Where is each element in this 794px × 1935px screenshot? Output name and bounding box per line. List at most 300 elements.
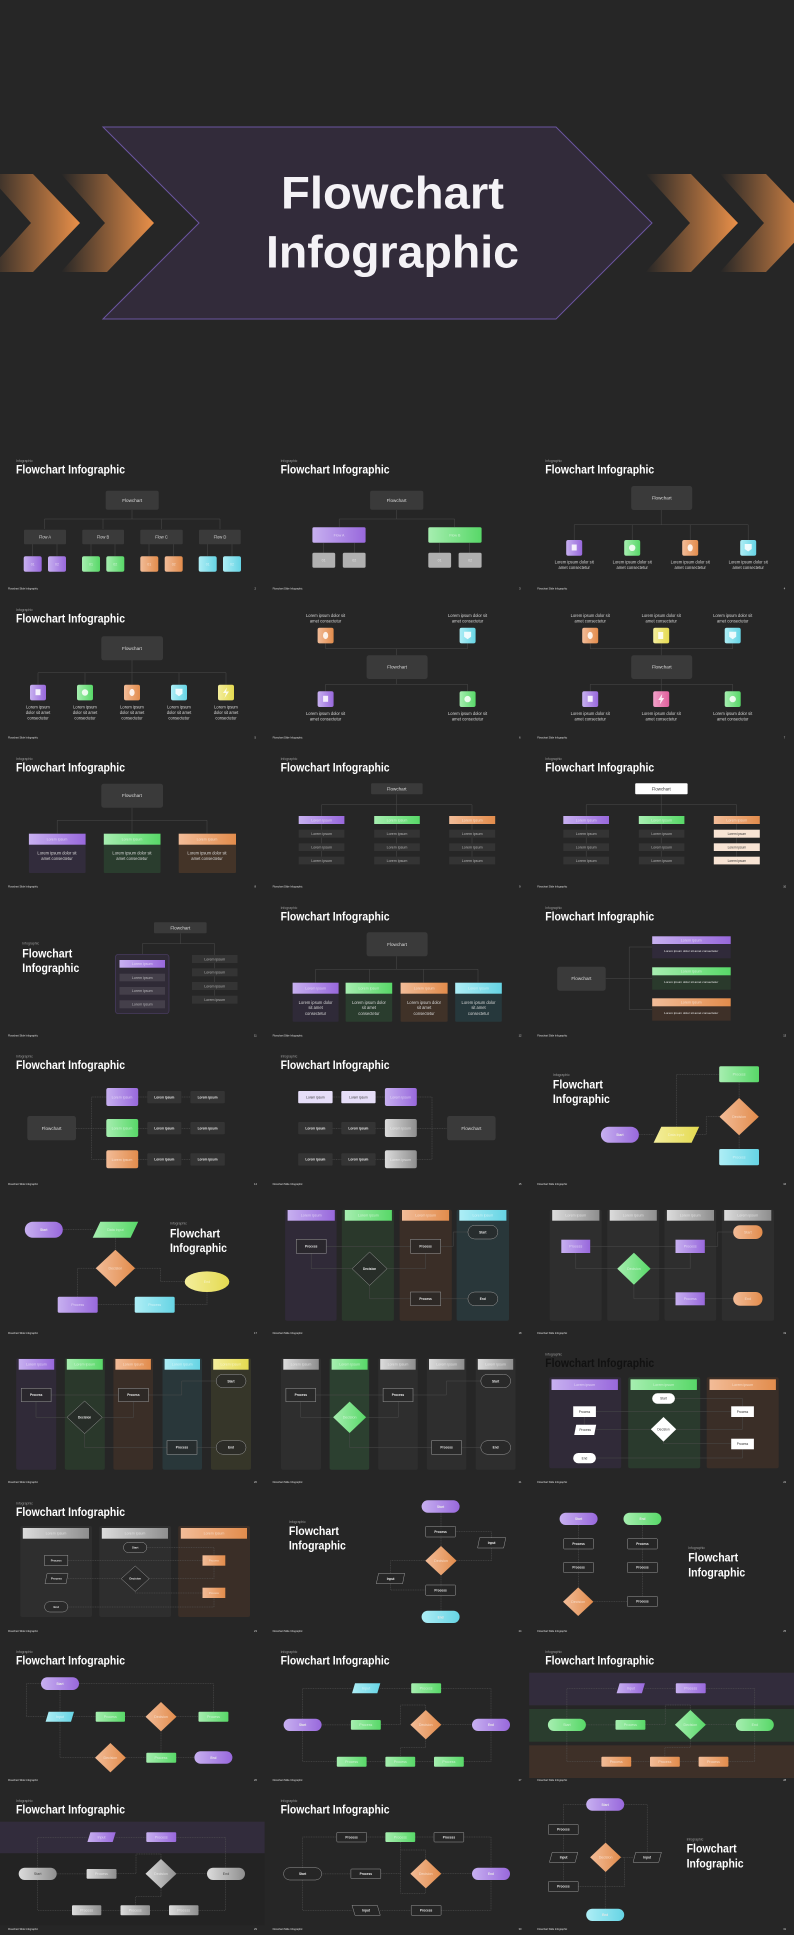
heading: Flowchart Infographic xyxy=(281,762,390,774)
swimlane headers: Lorem ipsum xyxy=(473,1214,493,1218)
input parallelogram xyxy=(93,1222,138,1238)
left nodes: Process xyxy=(557,1885,570,1889)
start terminator xyxy=(124,1542,147,1553)
connectors xyxy=(76,1097,190,1159)
end pill: End xyxy=(488,1872,494,1876)
process: cyan: Process xyxy=(733,1156,746,1160)
root box: Flowchart xyxy=(387,498,407,503)
root box xyxy=(27,1116,76,1140)
item grid: Lorem ipsum xyxy=(305,1158,326,1162)
swimlane headers: Lorem ipsum xyxy=(26,1362,47,1366)
heading: Flowchart Infographic xyxy=(545,1656,655,1668)
icon: purple flag xyxy=(30,685,46,700)
captions: Lorem ipsum dolor sit xyxy=(671,560,711,565)
decision: Decision xyxy=(419,1872,433,1876)
slide 4: four icons xyxy=(537,459,786,590)
icon: pink runner xyxy=(653,691,669,707)
column: purple: Lorem ipsum xyxy=(576,832,597,836)
decision bottom: Decision xyxy=(104,1756,117,1760)
process nodes: Process xyxy=(177,1909,190,1913)
root box xyxy=(557,967,606,991)
slide 20: five swimlanes colored xyxy=(8,1358,257,1484)
heading: Flowchart Infographic xyxy=(16,1656,126,1668)
process nodes: Process xyxy=(345,1760,358,1764)
left nodes: Input xyxy=(560,1856,568,1860)
heading: Flowchart Infographic xyxy=(281,1060,390,1072)
arrow: right chevrons xyxy=(646,174,794,272)
decision diamond xyxy=(425,1546,457,1575)
root box xyxy=(447,1116,496,1140)
footer: 13 xyxy=(783,1033,787,1037)
column: purple xyxy=(299,816,344,864)
column: purple: Lorem ipsum xyxy=(576,846,597,850)
input parallelogram: Data input xyxy=(107,1228,124,1232)
card: purple: Lorem ipsum dolor sit amet consectetur xyxy=(664,949,718,953)
flow B: Flow B xyxy=(449,533,461,537)
footer: 31 xyxy=(783,1927,787,1931)
heading: Infographic xyxy=(545,1650,562,1654)
swimlane headers: Lorem ipsum xyxy=(737,1214,758,1218)
captions: amet consectetur xyxy=(674,565,707,570)
gray pills xyxy=(19,1868,245,1880)
slide 25: two vertical flows xyxy=(537,1513,787,1633)
process nodes xyxy=(337,1683,464,1767)
card: cyan xyxy=(455,983,502,1022)
footer xyxy=(537,1331,787,1335)
icon: yellow bolt xyxy=(218,685,234,700)
numbered squares: 02 xyxy=(172,562,176,566)
input right xyxy=(478,1538,506,1548)
left nodes: Process xyxy=(51,1577,62,1581)
swimlane bodies xyxy=(549,1377,779,1468)
card: purple: sit amet xyxy=(308,1005,324,1010)
numbered squares: 01 xyxy=(147,562,151,566)
end terminator: End xyxy=(54,1605,59,1609)
heading: Infographic xyxy=(289,1541,346,1553)
connectors xyxy=(38,1837,226,1910)
connectors xyxy=(574,510,748,540)
footer: 26 xyxy=(254,1778,257,1782)
captions xyxy=(555,560,769,570)
heading xyxy=(16,1054,126,1072)
card: purple xyxy=(652,936,731,958)
footer: Flowchart Slide Infographic xyxy=(537,1629,568,1633)
footer xyxy=(8,1778,257,1782)
swimlane bodies xyxy=(16,1358,251,1470)
decision diamond: Decision xyxy=(571,1600,585,1604)
captions xyxy=(306,613,488,722)
process nodes: Process xyxy=(30,1393,43,1397)
footer xyxy=(8,736,256,740)
footer: Flowchart Slide Infographic xyxy=(8,1182,39,1186)
start and end pills: Start xyxy=(299,1723,307,1727)
captions: amet consectetur xyxy=(452,618,484,623)
captions: amet consectetur xyxy=(310,717,342,722)
item grid: Lorem ipsum xyxy=(154,1095,174,1099)
process row: Process xyxy=(207,1715,220,1719)
heading xyxy=(16,608,126,626)
process nodes: Process xyxy=(707,1760,720,1764)
process nodes: Process xyxy=(442,1760,456,1764)
connectors xyxy=(63,1230,207,1305)
process nodes: Process xyxy=(624,1723,637,1727)
process nodes: Process xyxy=(305,1244,318,1248)
heading: Infographic xyxy=(170,1222,187,1226)
item grid: Lorem ipsum xyxy=(306,1095,325,1099)
root box xyxy=(631,655,692,679)
decision top: Decision xyxy=(154,1715,168,1719)
heading: Infographic xyxy=(16,1054,33,1058)
white left nodes: Process xyxy=(579,1428,591,1432)
hero banner xyxy=(0,127,794,319)
heading xyxy=(545,906,655,924)
heading: Infographic xyxy=(22,963,80,975)
process nodes xyxy=(72,1832,198,1915)
start pill: Start xyxy=(40,1228,48,1232)
captions: consectetur xyxy=(168,715,190,720)
slide 10: highlighted column xyxy=(537,757,787,888)
heading: Infographic xyxy=(281,459,298,463)
heading: Flowchart xyxy=(289,1526,339,1538)
footer xyxy=(273,586,521,590)
captions: amet consectetur xyxy=(558,565,591,570)
terminators xyxy=(216,1374,246,1454)
connectors xyxy=(57,808,207,834)
footer xyxy=(537,586,786,590)
heading: Infographic xyxy=(16,608,33,612)
footer: 7 xyxy=(784,736,786,740)
heading xyxy=(687,1838,744,1870)
heading xyxy=(16,757,126,774)
icon: cyan board xyxy=(460,628,476,643)
start pill xyxy=(422,1500,460,1513)
end pill xyxy=(573,1453,596,1463)
arrow: left chevrons xyxy=(0,174,154,272)
card: orange xyxy=(652,998,731,1021)
numbered squares: 01 xyxy=(31,562,35,566)
card: green: Lorem ipsum xyxy=(359,986,379,990)
root box xyxy=(154,922,207,933)
flow boxes: Flow A xyxy=(39,534,51,540)
start and end pills: End xyxy=(488,1723,494,1727)
captions: dolor sit amet xyxy=(167,710,192,715)
numbered squares: 01 xyxy=(206,562,210,566)
footer: 16 xyxy=(783,1182,787,1186)
card: green: Lorem ipsum xyxy=(681,970,702,974)
swimlane headers: Lorem ipsum xyxy=(680,1214,701,1218)
footer xyxy=(537,1182,787,1186)
root box: Flowchart xyxy=(652,665,672,670)
footer: Flowchart Slide Infographic xyxy=(537,1033,568,1037)
card: cyan: Lorem ipsum dolor xyxy=(462,1000,496,1005)
card: green: Lorem ipsum dolor xyxy=(352,1000,386,1005)
heading xyxy=(16,1799,126,1816)
captions: dolor sit amet xyxy=(214,710,239,715)
card: green: Lorem ipsum xyxy=(122,838,142,842)
card: purple: consectetur xyxy=(305,1011,327,1016)
footer: Flowchart Slide Infographic xyxy=(537,1182,568,1186)
decision diamond xyxy=(563,1587,593,1616)
card: green: amet consectetur xyxy=(116,856,148,861)
start outlined xyxy=(284,1868,322,1880)
white right nodes: Process xyxy=(737,1410,749,1414)
heading: Flowchart xyxy=(687,1844,737,1856)
footer: Flowchart Slide Infographic xyxy=(273,586,303,590)
process lower xyxy=(146,1753,176,1763)
root box: Flowchart xyxy=(652,496,672,500)
footer: 17 xyxy=(254,1331,257,1335)
swimlane headers: Lorem ipsum xyxy=(388,1362,408,1366)
left nodes xyxy=(548,1824,578,1892)
decision green xyxy=(617,1253,651,1285)
footer xyxy=(273,1927,522,1931)
input right xyxy=(633,1852,661,1862)
heading: Flowchart Infographic xyxy=(545,762,655,774)
top row xyxy=(337,1832,464,1842)
footer: Flowchart Slide Infographic xyxy=(273,1629,303,1633)
panel: central arrow xyxy=(103,127,652,319)
footer: 22 xyxy=(783,1480,787,1484)
heading xyxy=(289,1520,346,1553)
heading: Flowchart xyxy=(170,1228,220,1240)
column: green: Lorem ipsum xyxy=(387,846,407,850)
footer xyxy=(273,736,521,740)
captions: amet consectetur xyxy=(310,618,342,623)
root box xyxy=(631,486,692,510)
colored nodes: Lorem ipsum xyxy=(390,1096,411,1100)
process nodes: Process xyxy=(658,1760,672,1764)
connectors xyxy=(303,1688,491,1762)
card: orange: Lorem ipsum xyxy=(681,1001,702,1005)
icon: green gear xyxy=(725,691,741,707)
card: green xyxy=(104,834,160,873)
gray pills: End xyxy=(223,1872,229,1876)
top row: Process xyxy=(394,1836,407,1840)
process bottom: Process xyxy=(434,1588,447,1592)
right processes xyxy=(628,1539,657,1607)
footer: Flowchart Slide Infographic xyxy=(273,1033,303,1037)
icon: purple flag xyxy=(582,691,598,707)
captions: consectetur xyxy=(27,715,49,720)
root box: Flowchart xyxy=(387,786,407,792)
column: green xyxy=(639,816,684,864)
terminators: End xyxy=(493,1446,499,1450)
heading: Infographic xyxy=(688,1567,746,1579)
heading xyxy=(281,1650,390,1668)
root box: Flowchart xyxy=(170,926,191,930)
footer: 15 xyxy=(519,1182,522,1186)
input xyxy=(352,1683,380,1693)
captions xyxy=(26,705,239,720)
footer xyxy=(8,1331,257,1335)
bottom row: Process xyxy=(420,1908,433,1912)
root box: Flowchart xyxy=(387,665,408,670)
icon: purple flag xyxy=(566,540,582,556)
card: cyan: Lorem ipsum xyxy=(468,986,489,990)
connectors xyxy=(606,947,652,1010)
swimlane headers: Lorem ipsum xyxy=(339,1362,360,1366)
process top xyxy=(426,1526,456,1537)
footer: 18 xyxy=(519,1331,522,1335)
start pill xyxy=(41,1677,79,1690)
heading dark: Flowchart Infographic xyxy=(545,1358,655,1370)
footer xyxy=(8,1033,257,1037)
input parallelogram xyxy=(654,1127,699,1143)
colored nodes: Lorem ipsum xyxy=(112,1158,132,1162)
heading: Infographic xyxy=(16,757,33,761)
footer: 3 xyxy=(519,586,521,590)
heading: Flowchart xyxy=(688,1553,738,1565)
footer: 24 xyxy=(519,1629,522,1633)
decision outline: Decision xyxy=(129,1577,141,1581)
card: purple: Lorem ipsum xyxy=(305,986,326,990)
end pill xyxy=(472,1868,510,1880)
numbered squares: 02 xyxy=(468,558,472,562)
heading xyxy=(22,942,80,975)
item grid: Lorem ipsum xyxy=(154,1158,174,1162)
start pill: Start xyxy=(56,1682,65,1686)
captions: amet consectetur xyxy=(574,618,607,623)
root box xyxy=(370,491,423,510)
flow boxes: Flow B xyxy=(97,534,110,540)
connectors xyxy=(586,794,737,857)
footer: 20 xyxy=(254,1480,257,1484)
start pill xyxy=(586,1798,624,1811)
heading: Infographic xyxy=(688,1546,705,1550)
footer xyxy=(8,1629,257,1633)
swimlane headers xyxy=(552,1379,776,1390)
end terminator xyxy=(45,1602,68,1612)
item grid xyxy=(298,1091,376,1166)
icon: orange hand xyxy=(318,628,334,643)
process nodes: Process xyxy=(394,1760,407,1764)
swimlane headers xyxy=(288,1210,506,1221)
column: orange: Lorem ipsum xyxy=(462,832,483,836)
green pills: End xyxy=(752,1723,758,1727)
footer: Flowchart Slide Infographic xyxy=(537,586,568,590)
footer: Flowchart Slide Infographic xyxy=(273,736,303,740)
footer: Flowchart Slide Infographic xyxy=(8,736,39,740)
footer: 9 xyxy=(519,884,521,888)
decision outline xyxy=(352,1252,387,1285)
connectors xyxy=(567,1688,755,1762)
footer: Flowchart Slide Infographic xyxy=(273,1778,303,1782)
decision: Decision xyxy=(154,1872,168,1876)
item grid: Lorem ipsum xyxy=(154,1126,174,1130)
slide 17: flow with ellipse xyxy=(8,1222,257,1335)
terminators: Start xyxy=(227,1379,236,1383)
heading: Infographic xyxy=(281,1054,298,1058)
item grid: Lorem ipsum xyxy=(198,1126,218,1130)
item grid: Lorem ipsum xyxy=(348,1126,369,1130)
heading: Infographic xyxy=(16,459,33,463)
heading: Infographic xyxy=(687,1858,744,1870)
swimlane headers: Lorem ipsum xyxy=(574,1383,595,1387)
heading: Flowchart Infographic xyxy=(16,1060,126,1072)
footer xyxy=(537,1033,787,1037)
numbered squares: 02 xyxy=(230,562,234,566)
footer xyxy=(8,1480,257,1484)
process nodes xyxy=(561,1240,705,1305)
connectors xyxy=(26,1684,214,1758)
connectors xyxy=(590,643,733,691)
start terminator: Start xyxy=(132,1546,138,1550)
footer xyxy=(8,1927,257,1931)
card: orange: consectetur xyxy=(414,1011,435,1016)
panel: highlighted list: Lorem ipsum xyxy=(132,962,153,966)
process nodes: Process xyxy=(129,1909,142,1913)
start and end pills xyxy=(284,1719,510,1731)
connectors xyxy=(316,956,478,983)
footer: Flowchart Slide Infographic xyxy=(273,1331,303,1335)
swimlane headers: Lorem ipsum xyxy=(291,1362,311,1366)
input right: Input xyxy=(643,1856,652,1860)
icon: cyan board xyxy=(740,540,756,556)
process row: Process xyxy=(104,1715,117,1719)
flow boxes: Flow D xyxy=(214,534,226,540)
heading: Infographic xyxy=(16,1799,33,1803)
card: orange: Lorem ipsum dolor sit amet consectetur xyxy=(664,1011,718,1015)
heading: Infographic xyxy=(553,1073,570,1077)
process: purple: Process xyxy=(71,1303,84,1307)
decision xyxy=(675,1710,706,1739)
footer: 11 xyxy=(254,1033,257,1037)
footer: Flowchart Slide Infographic xyxy=(537,736,568,740)
captions: Lorem ipsum dolor sit xyxy=(555,560,595,565)
swimlane headers: Lorem ipsum xyxy=(172,1362,193,1366)
heading: Flowchart Infographic xyxy=(281,912,390,924)
captions: consectetur xyxy=(121,715,143,720)
decision xyxy=(410,1859,441,1888)
footer: 10 xyxy=(783,884,787,888)
left nodes: Process xyxy=(557,1828,570,1832)
captions: consectetur xyxy=(74,715,96,720)
item grid: Lorem ipsum xyxy=(198,1095,218,1099)
captions: Lorem ipsum xyxy=(167,705,191,710)
card: purple: Lorem ipsum xyxy=(47,838,67,842)
swimlane headers: Lorem ipsum xyxy=(565,1214,586,1218)
terminators orange xyxy=(733,1225,762,1306)
root box xyxy=(101,636,163,660)
item grid: Lorem ipsum xyxy=(305,1126,326,1130)
heading xyxy=(170,1222,228,1255)
heading xyxy=(281,906,390,924)
column: orange: Lorem ipsum xyxy=(462,859,483,863)
orange nodes xyxy=(202,1555,225,1598)
footer: Flowchart Slide Infographic xyxy=(273,1927,303,1931)
card: orange: amet consectetur xyxy=(191,856,223,861)
slide 24: vertical flow with inputs xyxy=(273,1500,522,1633)
white right nodes xyxy=(731,1406,754,1449)
captions: Lorem ipsum dolor sit xyxy=(713,711,753,716)
colored nodes: Lorem ipsum xyxy=(390,1158,411,1162)
connectors xyxy=(324,510,470,553)
footer: Flowchart Slide Infographic xyxy=(8,1778,39,1782)
card: orange: sit amet xyxy=(417,1005,432,1010)
decision green: Decision xyxy=(343,1416,356,1420)
footer: 5 xyxy=(254,736,256,740)
captions: dolor sit amet xyxy=(73,710,98,715)
footer xyxy=(8,884,256,888)
icon: green gear xyxy=(460,691,476,707)
connectors xyxy=(563,1804,647,1909)
column: orange: Lorem ipsum xyxy=(462,846,483,850)
footer xyxy=(273,1480,522,1484)
captions: amet consectetur xyxy=(732,565,765,570)
middle process: Process xyxy=(360,1872,372,1876)
process: cyan xyxy=(719,1149,759,1165)
slide 6: four icons around box xyxy=(273,613,521,740)
